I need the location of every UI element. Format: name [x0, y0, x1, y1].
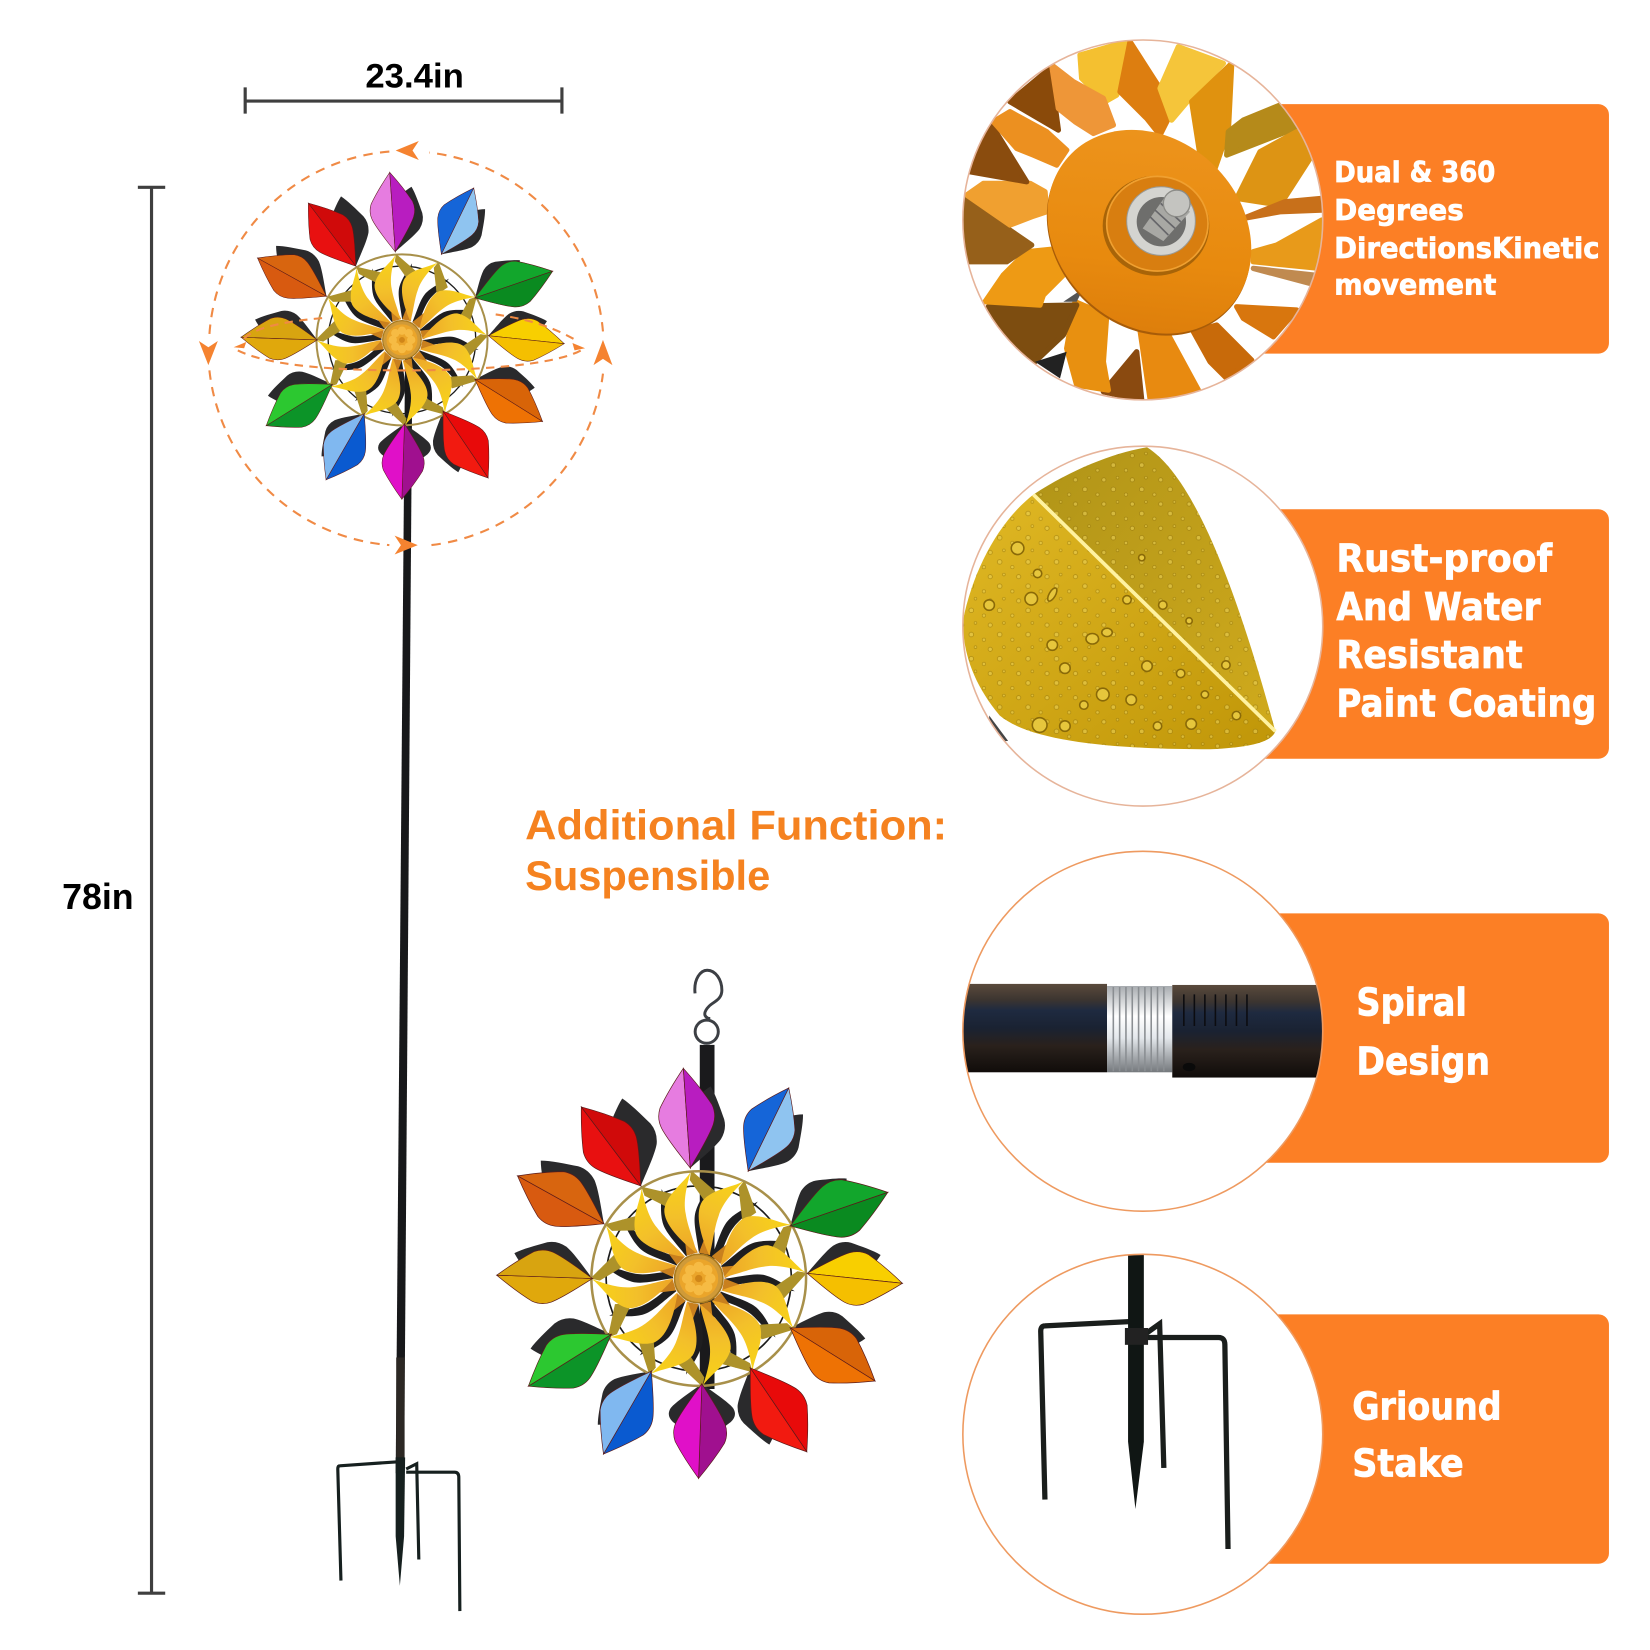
panel: bearing	[963, 40, 1609, 400]
panel: paint coating	[963, 446, 1609, 806]
rotation arrows dashed	[199, 141, 612, 555]
label text: Dual & 360	[1334, 156, 1495, 189]
label box	[1210, 509, 1609, 759]
photo: bearing	[963, 42, 1322, 400]
heading: additional function	[525, 802, 947, 899]
label box	[1210, 913, 1609, 1163]
hub disc	[1046, 177, 1250, 336]
label text: movement	[1334, 269, 1496, 302]
label box	[1210, 104, 1609, 354]
width label: 23.4in	[365, 57, 464, 95]
label text: And Water	[1336, 585, 1541, 629]
label text: Resistant	[1336, 633, 1523, 677]
panel: spiral design	[963, 851, 1609, 1211]
label text	[1352, 1385, 1502, 1485]
label box	[1210, 1314, 1609, 1564]
label text	[1336, 536, 1596, 726]
label text	[1334, 156, 1599, 302]
suspended pinwheel	[496, 970, 905, 1479]
label text: DirectionsKinetic	[1334, 232, 1599, 265]
label text: Griound	[1352, 1385, 1502, 1429]
heading: additional function: Suspensible	[525, 852, 770, 899]
width dimension	[245, 57, 562, 114]
height label: 78in	[62, 877, 134, 917]
heading: additional function: Additional Function:	[525, 802, 947, 849]
label text: Rust-proof	[1336, 536, 1553, 580]
label text: Spiral	[1356, 980, 1467, 1024]
ground stake small	[338, 1457, 460, 1611]
panel: ground stake	[963, 1254, 1609, 1614]
label text: Stake	[1352, 1441, 1464, 1485]
pinwheel main	[240, 171, 566, 500]
label text	[1356, 980, 1490, 1083]
main pole	[396, 347, 412, 1473]
label text: Design	[1356, 1039, 1490, 1083]
height dimension	[62, 187, 165, 1593]
label text: Degrees	[1334, 194, 1464, 227]
photo: gold leaf with droplets	[963, 447, 1275, 749]
photo: threaded pole	[963, 984, 1323, 1078]
photo: ground stake	[1041, 1254, 1228, 1549]
label text: Paint Coating	[1336, 682, 1596, 726]
arrowheads	[199, 141, 612, 555]
